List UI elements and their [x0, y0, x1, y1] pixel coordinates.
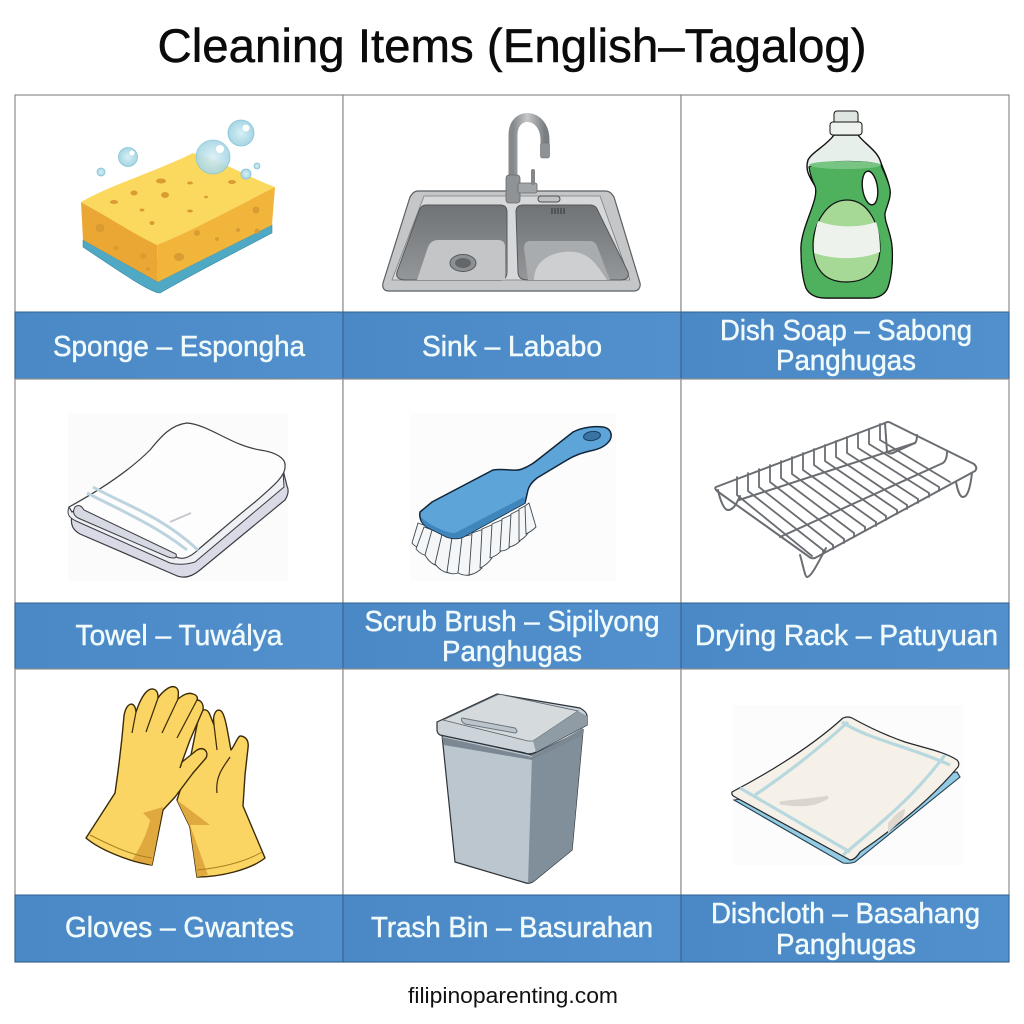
- label: towel: [15, 603, 343, 669]
- panel: scrub brush: [343, 379, 681, 669]
- label: sponge: Sponge – Espongha: [53, 331, 306, 363]
- icon: sponge: [81, 120, 275, 293]
- label: drying rack: [681, 603, 1009, 669]
- label: dish soap: Panghugas: [776, 345, 916, 377]
- label: drying rack: Drying Rack – Patuyuan: [695, 620, 998, 652]
- icon: trash bin: [437, 694, 587, 883]
- label: scrub brush: [343, 603, 681, 669]
- panel: towel: [15, 379, 343, 669]
- label: scrub brush: Panghugas: [442, 636, 582, 668]
- icon: dish soap bottle: [801, 111, 892, 298]
- label: trash bin: [343, 895, 681, 962]
- label: sponge: [15, 312, 343, 379]
- panel: drying rack: [681, 379, 1009, 669]
- panel: gloves: [15, 669, 343, 962]
- label: sink: Sink – Lababo: [422, 331, 602, 363]
- icon: rubber gloves: [86, 687, 265, 877]
- label: dish soap: Dish Soap – Sabong: [720, 315, 972, 347]
- label: dishcloth: Panghugas: [776, 929, 916, 961]
- label: sink: [343, 312, 681, 379]
- label: dishcloth: [681, 895, 1009, 962]
- label: dishcloth: Dishcloth – Basahang: [711, 898, 980, 930]
- icon: sink: [383, 118, 640, 291]
- panel: sink: [343, 95, 681, 379]
- label: gloves: Gloves – Gwantes: [65, 912, 294, 944]
- icon: dishcloth: [732, 705, 964, 865]
- label: gloves: [15, 895, 343, 962]
- title: Cleaning Items (English–Tagalog): [158, 19, 866, 72]
- footer: website: filipinoparenting.com: [408, 983, 618, 1008]
- label: dish soap: [681, 312, 1009, 379]
- icon: scrub brush: [410, 413, 616, 581]
- panel: trash bin: [343, 669, 681, 962]
- label: scrub brush: Scrub Brush – Sipilyong: [364, 606, 660, 638]
- icon: towel: [68, 413, 288, 581]
- label: towel: Towel – Tuwálya: [76, 620, 283, 652]
- panel: sponge: [15, 95, 343, 379]
- panel: dishcloth: [681, 669, 1009, 962]
- panel: dish soap: [681, 95, 1009, 379]
- icon: drying rack: [715, 422, 976, 577]
- label: trash bin: Trash Bin – Basurahan: [371, 912, 653, 944]
